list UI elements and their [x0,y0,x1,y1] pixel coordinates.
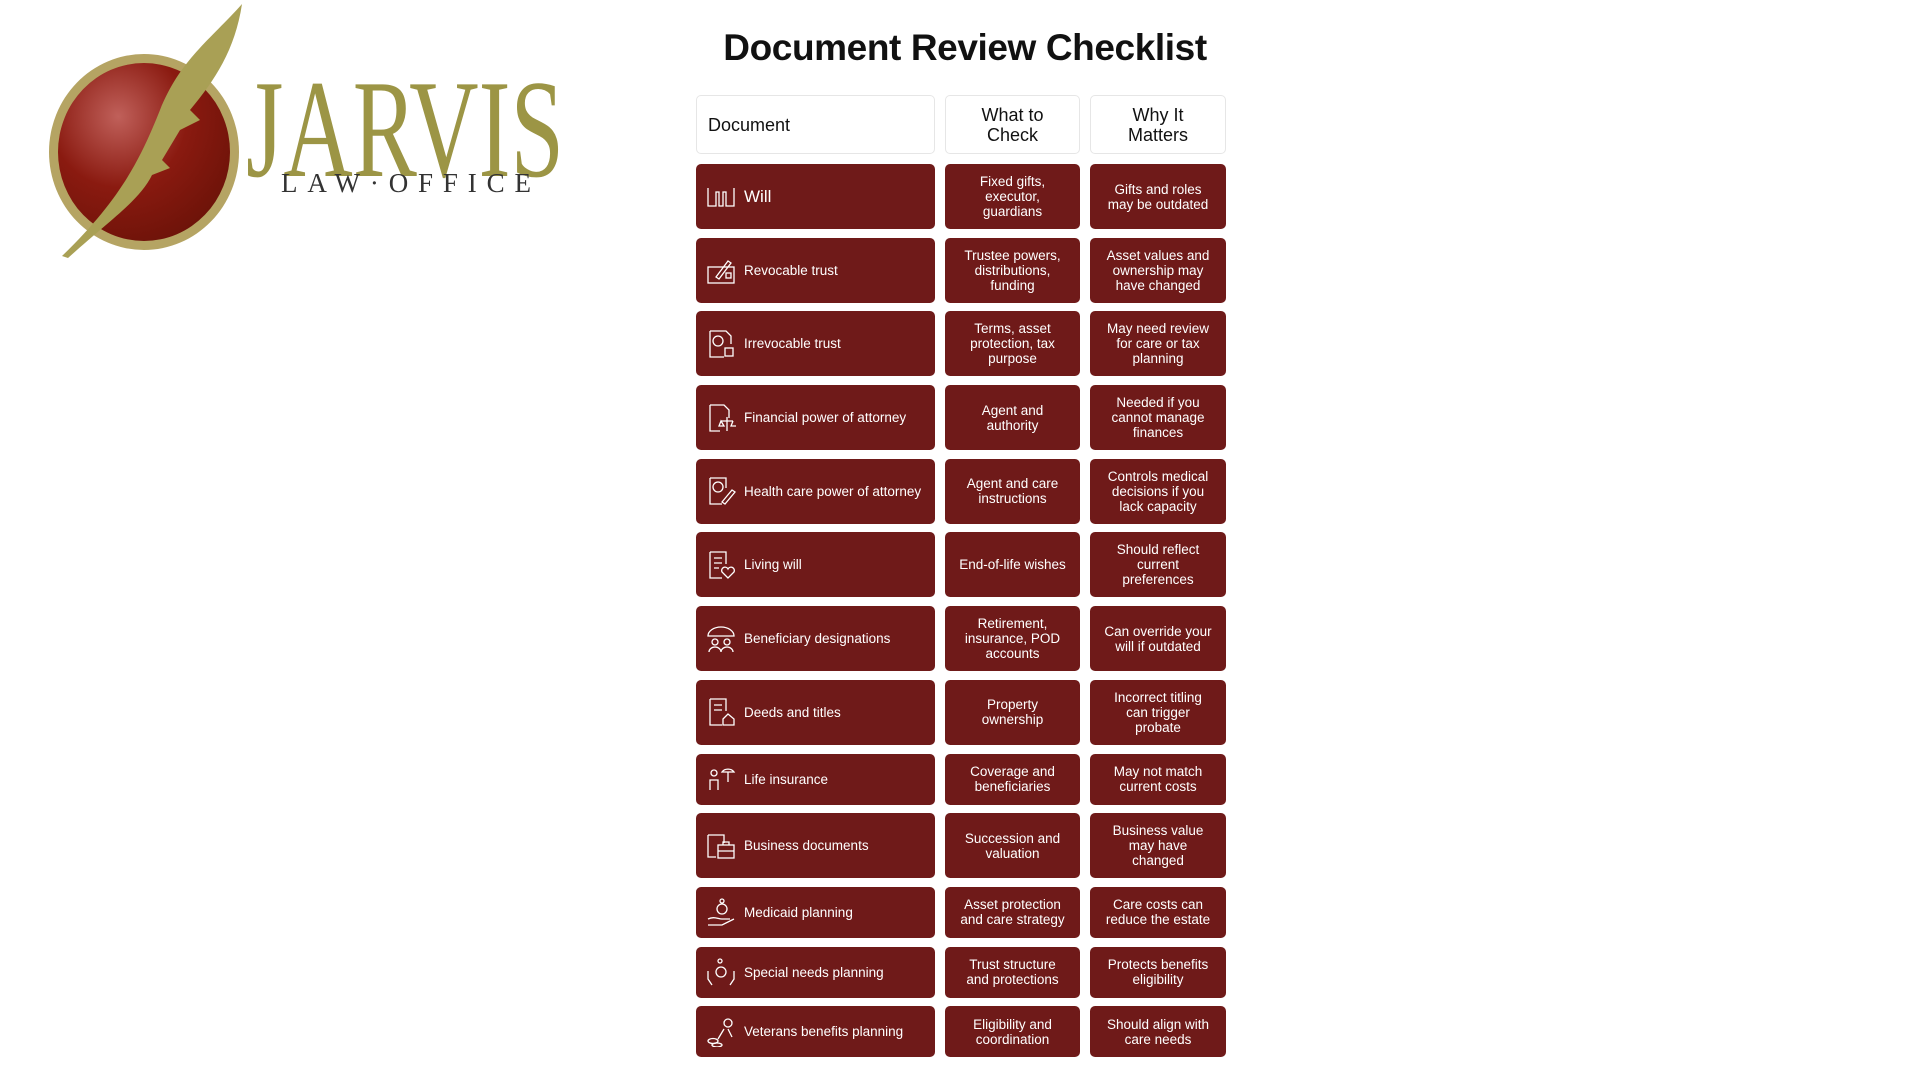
header row: Matters [1128,124,1188,144]
row: deeds and titles [696,680,1226,745]
row: revocable trust: Revocable trust [744,263,838,278]
header row [696,95,1226,154]
row: life insurance: Coverage and [970,764,1055,779]
icon: red circle [49,54,239,250]
row: life insurance: Life insurance [744,772,828,786]
logo [49,4,564,258]
row: special needs planning: eligibility [1132,972,1184,987]
row: irrevocable trust [696,311,1226,376]
row: will: guardians [983,204,1042,219]
row: beneficiary designations [696,606,1226,671]
row: will [696,164,1226,229]
row: special needs planning [696,947,1226,998]
row: special needs planning: and protections [966,972,1059,987]
row: veterans benefits planning: care needs [1125,1032,1191,1047]
row: living will: preferences [1122,572,1194,587]
row: life insurance: current costs [1119,779,1197,794]
row: deeds and titles: Incorrect titling [1114,690,1202,705]
row: financial poa: Needed if you [1116,395,1200,410]
row: deeds and titles: can trigger [1126,705,1190,720]
row: medicaid planning: Asset protection [964,897,1061,912]
row: revocable trust: distributions, [975,263,1050,278]
row: health care poa: Agent and care [967,476,1058,491]
row: financial poa: authority [987,418,1038,433]
header row: What to [981,104,1044,124]
row: deeds and titles: Property [987,697,1038,712]
row: veterans benefits planning [696,1006,1226,1057]
row: irrevocable trust: planning [1132,351,1184,366]
row: health care poa [696,459,1226,524]
row: irrevocable trust: purpose [988,351,1037,366]
row: living will: End-of-life wishes [959,557,1066,572]
row: beneficiary designations: will if outdated [1115,639,1201,654]
row: health care poa: decisions if you [1112,484,1204,499]
row: medicaid planning: and care strategy [960,912,1065,927]
row: medicaid planning [696,887,1226,938]
row: beneficiary designations: accounts [985,646,1040,661]
title: Document Review Checklist [723,27,1207,68]
row: life insurance: beneficiaries [975,779,1050,794]
row: living will: Living will [744,557,802,572]
row: business documents: changed [1132,853,1184,868]
row: beneficiary designations: Can override your [1104,624,1212,639]
row: will: Fixed gifts, [980,174,1045,189]
row: financial poa: Agent and [982,403,1043,418]
row: revocable trust: funding [990,278,1035,293]
header row: Document [708,114,790,134]
icon: feather [62,4,242,258]
row: special needs planning: Protects benefits [1108,957,1208,972]
row: will: Gifts and roles [1114,182,1202,196]
row: irrevocable trust: May need review [1107,321,1209,336]
row: irrevocable trust: for care or tax [1116,336,1200,351]
row: life insurance: May not match [1114,764,1202,779]
row: business documents: Business value [1113,823,1203,838]
row: irrevocable trust: Terms, asset [974,321,1051,336]
row: revocable trust [696,238,1226,303]
row: veterans benefits planning: Veterans benefits planning [744,1024,903,1039]
row: special needs planning: Special needs planning [744,965,884,980]
row: life insurance [696,754,1226,805]
row: deeds and titles: ownership [982,712,1043,727]
row: living will [696,532,1226,597]
row: financial poa [696,385,1226,450]
row: living will: Should reflect [1117,542,1199,557]
header row: Check [987,124,1038,144]
row: financial poa: Financial power of attorney [744,410,906,425]
row: will: may be outdated [1108,196,1208,212]
row: health care poa: lack capacity [1119,499,1197,514]
row: beneficiary designations: Retirement, [978,616,1047,631]
row: veterans benefits planning: Eligibility and [973,1017,1052,1032]
row: medicaid planning: Care costs can [1113,897,1203,912]
row: revocable trust: Asset values and [1107,248,1209,263]
row: business documents: Business documents [744,838,869,853]
row: health care poa: Controls medical [1108,469,1208,484]
row: beneficiary designations: Beneficiary designations [744,631,890,646]
row: irrevocable trust: Irrevocable trust [744,336,841,351]
row: health care poa: instructions [978,491,1047,506]
row: business documents [696,813,1226,878]
row: financial poa: cannot manage [1111,410,1205,425]
checklist table [696,95,1226,1057]
row: revocable trust: have changed [1116,278,1200,293]
row: deeds and titles: Deeds and titles [744,705,841,720]
row: irrevocable trust: protection, tax [970,336,1055,351]
row: revocable trust: Trustee powers, [964,248,1061,263]
row: business documents: may have [1129,838,1187,853]
row: living will: current [1137,557,1179,572]
row: will: Will [744,187,771,206]
row: deeds and titles: probate [1135,720,1181,735]
row: medicaid planning: reduce the estate [1106,912,1210,927]
row: business documents: Succession and [965,831,1060,846]
row: beneficiary designations: insurance, POD [965,631,1060,646]
row: veterans benefits planning: Should align with [1107,1017,1209,1032]
row: special needs planning: Trust structure [969,957,1056,972]
header row: Why It [1132,104,1184,124]
logo text: LAW·OFFICE [281,168,531,198]
row: financial poa: finances [1133,425,1183,440]
row: business documents: valuation [985,846,1040,861]
row: health care poa: Health care power of attorney [744,484,921,499]
row: veterans benefits planning: coordination [976,1032,1049,1047]
row: medicaid planning: Medicaid planning [744,905,853,920]
row: revocable trust: ownership may [1113,263,1203,278]
row: will: executor, [985,189,1040,204]
